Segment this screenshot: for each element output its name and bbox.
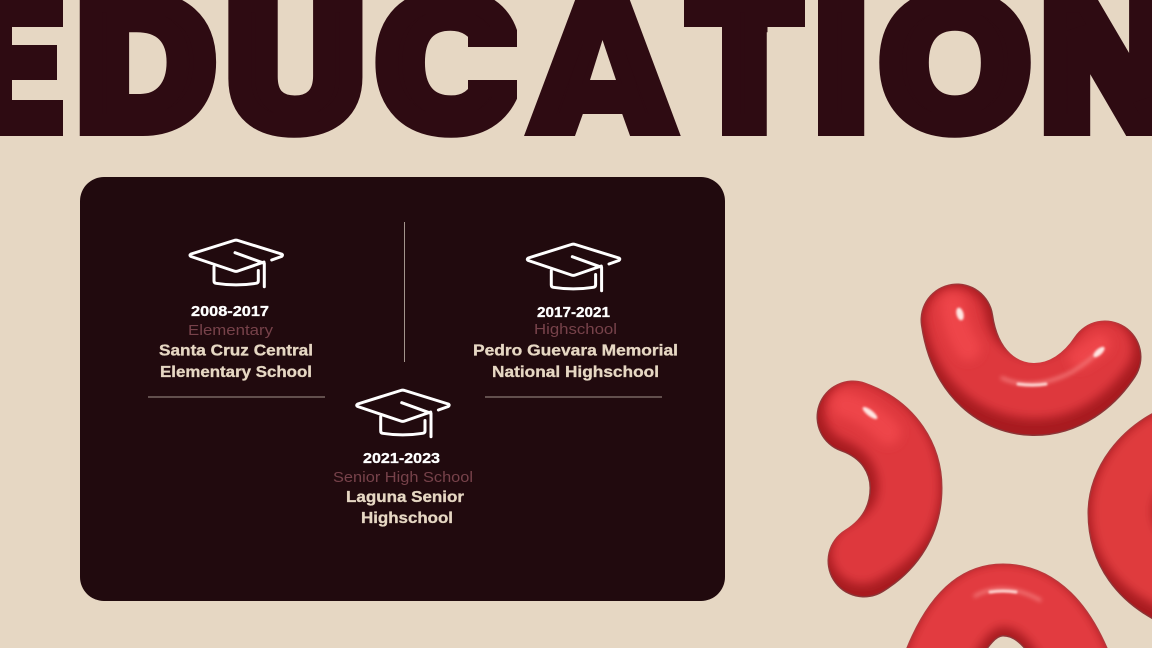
school name: National Highschool xyxy=(492,364,659,381)
shape: right macaroni xyxy=(1122,436,1152,590)
entry: highschool xyxy=(473,244,678,381)
shape: top macaroni xyxy=(953,306,1106,400)
school name: Santa Cruz Central xyxy=(159,342,313,360)
school name: Laguna Senior xyxy=(346,489,464,506)
level: Highschool xyxy=(534,321,617,338)
level: Elementary xyxy=(188,322,274,339)
date: 2017-2021 xyxy=(537,305,610,321)
school name xyxy=(473,342,678,381)
shape: bottom macaroni xyxy=(938,589,1080,648)
school name: Elementary School xyxy=(160,364,312,381)
school name xyxy=(346,489,464,527)
date: 2021-2023 xyxy=(363,451,440,467)
school name: Highschool xyxy=(361,510,453,527)
entry: senior high school xyxy=(333,390,473,527)
decoration: 3D red macaroni shapes xyxy=(845,306,1152,648)
icon: graduation cap xyxy=(527,244,620,291)
shape: left macaroni xyxy=(845,405,909,561)
date: 2008-2017 xyxy=(191,304,269,320)
panel: education timeline xyxy=(80,177,725,601)
icon: graduation cap xyxy=(190,240,282,287)
icon: graduation cap xyxy=(357,390,449,437)
school name: Pedro Guevara Memorial xyxy=(473,342,678,360)
entry: elementary xyxy=(159,240,313,381)
level: Senior High School xyxy=(333,469,473,486)
school name xyxy=(159,342,313,381)
